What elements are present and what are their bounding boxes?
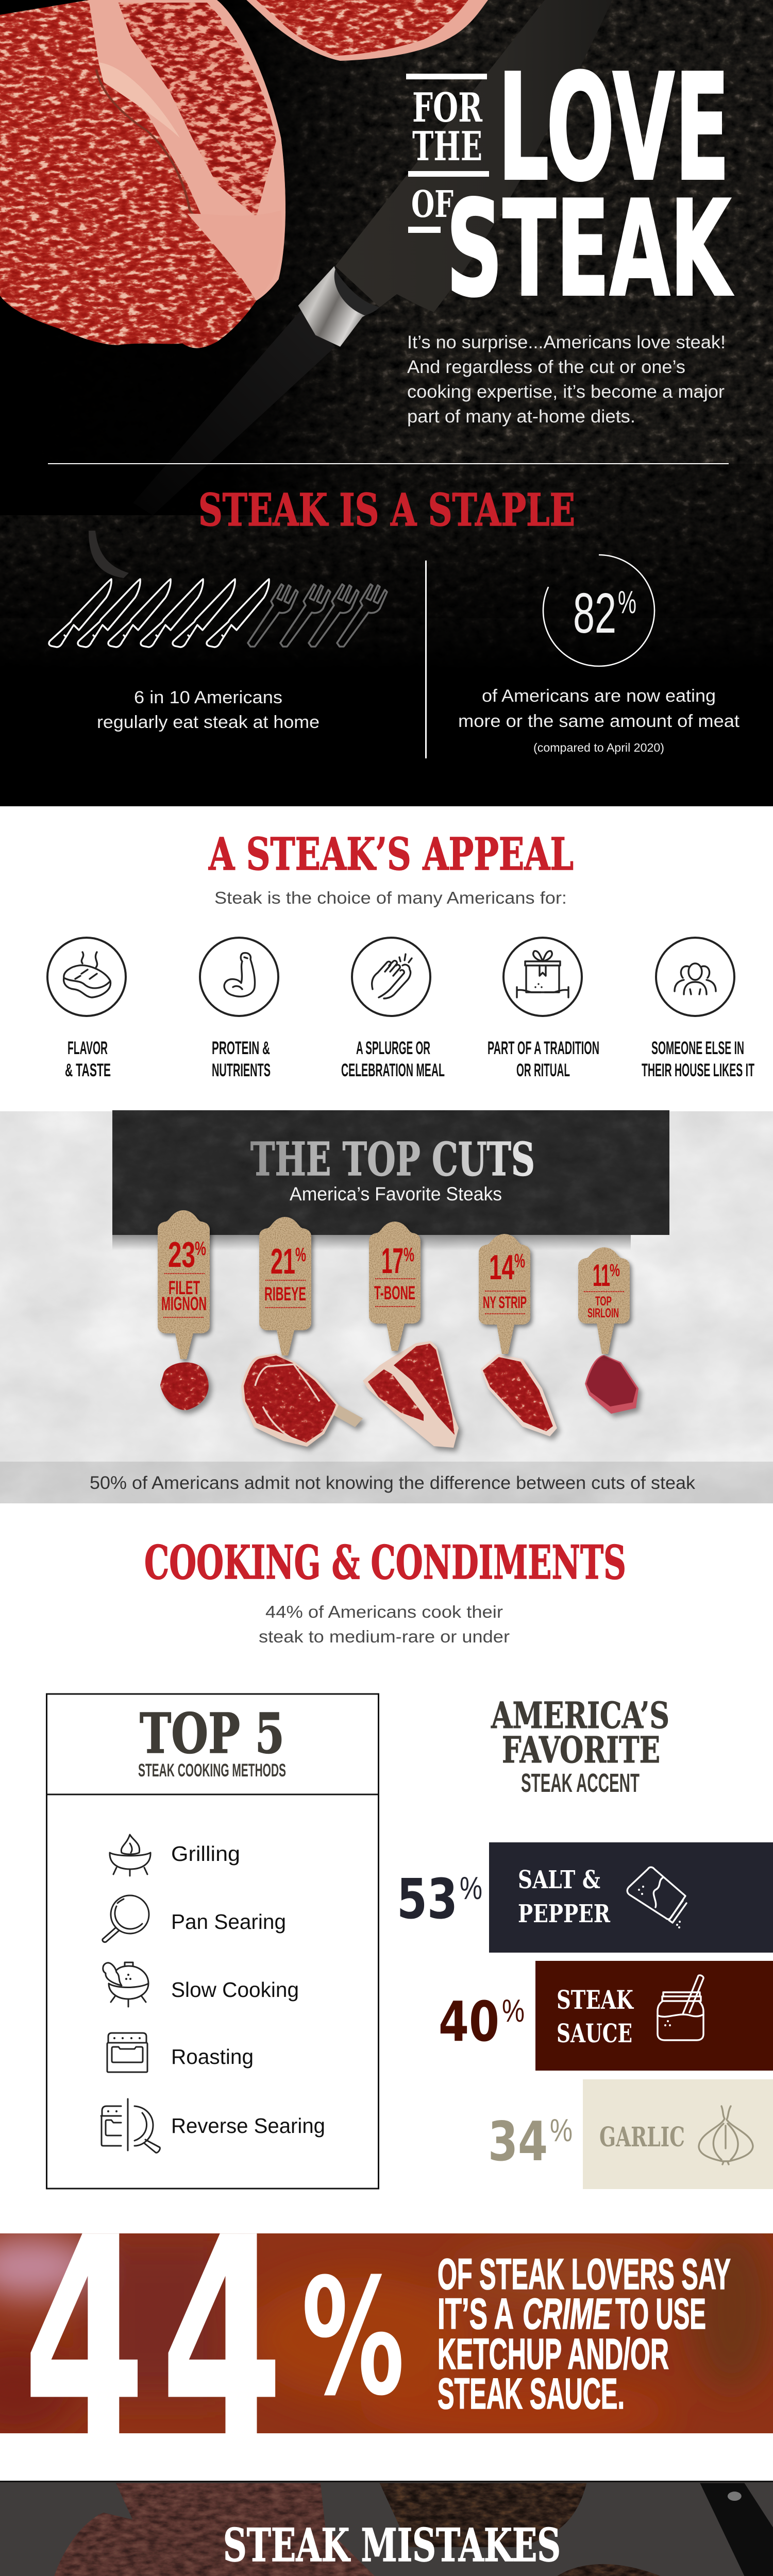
heading: favorite steak accent: FAVORITE	[502, 1728, 660, 1771]
tag shape	[369, 1222, 421, 1351]
label: Reverse Searing	[171, 2114, 325, 2138]
subheading: steak to medium-rare or under	[259, 1627, 510, 1646]
heading: steak mistakes: STEAK MISTAKES	[223, 2518, 561, 2572]
sauce photo background	[0, 2226, 773, 2442]
title: FOR THE OF: FOR	[412, 84, 483, 131]
stat: 82 percent text	[458, 686, 740, 754]
subheading	[259, 1602, 510, 1646]
intro paragraph: It’s no surprise...Americans love steak!	[407, 332, 726, 352]
banner text: IT’S A	[438, 2290, 514, 2338]
chalkboard	[112, 1110, 669, 1235]
label: Pan Searing	[171, 1910, 286, 1934]
subheading: Steak is the choice of many Americans for:	[214, 888, 567, 907]
method: grilling	[110, 1835, 240, 1876]
method: roasting	[107, 2033, 254, 2072]
name: NY STRIP	[483, 1293, 527, 1312]
label	[488, 1038, 599, 1080]
value: 14	[489, 1248, 514, 1287]
steak: ribeye	[241, 1353, 363, 1447]
icon: grill	[110, 1835, 150, 1876]
icon: clapping hands	[352, 938, 430, 1016]
appeal item: flavor and taste	[47, 938, 126, 1080]
panel: top 5 methods	[46, 1694, 379, 2189]
bar: salt and pepper 53%: %	[460, 1871, 482, 1906]
method: pan searing	[103, 1895, 286, 1942]
label: FLAVOR	[68, 1038, 108, 1058]
icon: flexed arm	[200, 938, 278, 1016]
icon: oven	[107, 2033, 147, 2072]
photo: plated sliced steaks	[0, 2482, 773, 2576]
label	[65, 1038, 111, 1080]
percent sign: %	[301, 2244, 405, 2431]
label: CELEBRATION MEAL	[341, 1060, 445, 1080]
value: 11	[593, 1258, 610, 1293]
label: OR RITUAL	[516, 1060, 570, 1080]
heading: a steak's appeal: A STEAK’S APPEAL	[208, 828, 574, 880]
banner text: CRIME	[523, 2290, 612, 2338]
label: A SPLURGE OR	[356, 1038, 430, 1058]
vertical divider	[425, 561, 427, 758]
bar: steak sauce 40%: %	[502, 1993, 525, 2029]
photo: chef knife	[167, 0, 612, 483]
big number 44: 44	[23, 2179, 298, 2498]
bar: garlic 34%	[488, 2079, 773, 2189]
title: FOR THE OF: OF	[411, 182, 453, 226]
title: FOR THE OF	[412, 92, 482, 217]
board shadow	[112, 1235, 631, 1250]
bar: steak sauce 40%: SAUCE	[557, 2018, 632, 2048]
tag shape	[578, 1247, 630, 1354]
stat: 82 percent text: of Americans are now eating	[482, 686, 716, 706]
panel: hero and steak is a staple	[0, 0, 773, 806]
subheading: America’s Favorite Steaks	[290, 1183, 502, 1205]
heading: steak is a staple: STEAK IS A STAPLE	[198, 484, 575, 536]
stone texture background	[0, 0, 773, 670]
steak: top sirloin	[585, 1355, 638, 1414]
tag shape	[158, 1210, 210, 1359]
tag shape	[479, 1234, 530, 1354]
label: PROTEIN &	[212, 1038, 270, 1058]
name: MIGNON	[161, 1293, 207, 1314]
tag: t-bone 17%: %	[404, 1244, 414, 1266]
stat: 82 percent text: (compared to April 2020)	[533, 741, 664, 754]
label	[212, 1038, 271, 1080]
icon: steak	[47, 938, 126, 1016]
meat slices top	[54, 2483, 661, 2576]
banner text	[438, 2250, 731, 2418]
label: GARLIC	[599, 2122, 685, 2153]
name: FILET	[169, 1277, 200, 1298]
intro paragraph: part of many at-home diets.	[407, 406, 635, 427]
banner text: TO USE	[615, 2290, 706, 2338]
subheading: 44% of Americans cook their	[265, 1602, 503, 1621]
title	[406, 69, 735, 298]
photo: large marbled steak	[0, 0, 285, 348]
appeal item: splurge or celebration	[341, 938, 445, 1080]
icon: pan	[103, 1895, 149, 1942]
title: FOR THE OF: THE	[412, 123, 482, 170]
label: PART OF A TRADITION	[488, 1038, 599, 1058]
tag: ribeye 21%	[259, 1217, 311, 1355]
title: LOVE STEAK	[446, 43, 733, 326]
steak: ny strip	[481, 1354, 557, 1436]
bar: salt and pepper 53%	[397, 1842, 773, 1953]
name: SIRLOIN	[587, 1306, 619, 1320]
banner text: STEAK SAUCE.	[438, 2369, 625, 2418]
tag: top sirloin 11%: %	[610, 1261, 620, 1280]
chart: 82 percent ring: 82	[573, 582, 616, 645]
intro paragraph	[407, 332, 726, 427]
name: TOP	[595, 1294, 612, 1309]
photo: knife pommel	[89, 531, 129, 578]
heading: the top cuts: THE TOP CUTS	[250, 1132, 535, 1186]
panel: a steak's appeal	[47, 828, 754, 1080]
stat: 6 in 10: 6 in 10 Americans	[134, 688, 282, 707]
tag: filet mignon 23%	[158, 1210, 210, 1359]
stat: 6 in 10	[97, 688, 320, 732]
label: & TASTE	[65, 1060, 111, 1080]
icon: gift in hands	[503, 938, 582, 1016]
icon: group of people	[656, 938, 734, 1016]
tag: filet mignon 23%: %	[195, 1238, 206, 1260]
chart: 82 percent ring	[543, 555, 654, 666]
icon: sauce jar	[658, 1975, 703, 2040]
panel: banner 44 percent	[0, 2179, 773, 2498]
chart: 82 percent ring: %	[618, 585, 636, 620]
intro paragraph: And regardless of the cut or one’s	[407, 357, 685, 377]
intro paragraph: cooking expertise, it’s become a major	[407, 382, 725, 402]
knife handle	[700, 2483, 773, 2576]
tag: ny strip 14%: %	[514, 1250, 525, 1272]
name: T-BONE	[374, 1282, 415, 1303]
photo: second steak	[246, 0, 488, 61]
steak: t-bone	[363, 1341, 459, 1448]
heading: favorite steak accent: STEAK ACCENT	[521, 1768, 640, 1798]
label: STEAK	[557, 1985, 634, 2015]
subheading: methods: STEAK COOKING METHODS	[138, 1760, 286, 1781]
appeal item: someone else	[642, 938, 754, 1080]
heading: top 5: TOP 5	[140, 1702, 284, 1766]
bar: steak sauce 40%	[439, 1961, 773, 2071]
caption: 50% of Americans admit not knowing the difference between cuts of steak	[90, 1473, 695, 1493]
value: 40	[439, 1990, 499, 2054]
label	[341, 1038, 445, 1080]
panel: steak mistakes	[0, 2481, 773, 2576]
icon: six knives	[49, 579, 269, 647]
value: 34	[488, 2110, 548, 2173]
tag: t-bone 17%	[369, 1222, 421, 1351]
method: slow cooking	[103, 1962, 299, 2007]
value: 23	[168, 1234, 195, 1275]
icon: four forks	[248, 584, 387, 647]
icon: half oven and half pan	[101, 2099, 160, 2153]
title bars	[406, 74, 489, 233]
label: NUTRIENTS	[212, 1060, 271, 1080]
name	[587, 1294, 619, 1320]
panel: the top cuts	[0, 1110, 773, 1503]
bottom band	[0, 1462, 773, 1503]
value: 17	[381, 1241, 404, 1281]
icon: kettle grill with smoke	[103, 1962, 148, 2007]
tag shape	[259, 1217, 311, 1355]
value: 53	[397, 1868, 458, 1931]
paper background	[0, 1111, 773, 1503]
label	[642, 1038, 754, 1080]
heading: favorite steak accent	[491, 1694, 669, 1798]
stat: 6 in 10: regularly eat steak at home	[97, 713, 320, 732]
tag: ribeye 21%: %	[295, 1244, 306, 1266]
label: Slow Cooking	[171, 1978, 299, 2002]
value: 21	[271, 1241, 295, 1281]
stat: 82 percent text: more or the same amount of meat	[458, 711, 740, 731]
icon: garlic bulb	[699, 2106, 753, 2164]
label: SALT &	[518, 1866, 600, 1894]
bar: garlic 34%: %	[550, 2113, 573, 2148]
heading: favorite steak accent: AMERICA’S	[491, 1694, 669, 1737]
name	[161, 1277, 207, 1314]
steak: filet mignon	[160, 1362, 209, 1410]
divider	[48, 463, 729, 464]
panel: cooking and condiments	[46, 1535, 773, 2189]
label: Roasting	[171, 2045, 254, 2069]
appeal item: protein	[200, 938, 278, 1080]
tag: top sirloin 11%	[578, 1247, 630, 1354]
name: RIBEYE	[264, 1283, 306, 1304]
bar: salt and pepper 53%: PEPPER	[518, 1900, 611, 1928]
appeal item: tradition or ritual	[488, 938, 599, 1080]
icon: salt shaker	[627, 1867, 686, 1927]
tag: ny strip 14%	[479, 1234, 530, 1354]
method: reverse searing	[101, 2099, 325, 2153]
label: Grilling	[171, 1842, 240, 1866]
